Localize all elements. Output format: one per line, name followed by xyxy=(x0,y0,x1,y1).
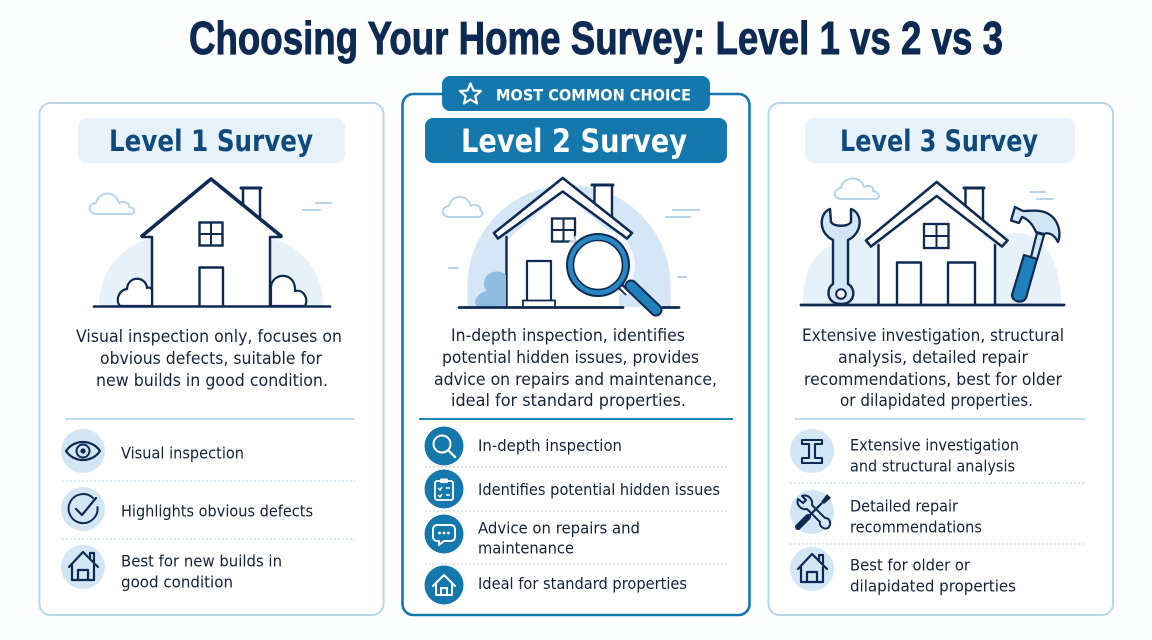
item: best for new builds: Best for new builds in xyxy=(121,552,282,570)
item: ideal for standard properties xyxy=(424,566,687,604)
icon: wrench xyxy=(822,209,860,304)
item: best for new builds xyxy=(61,545,282,592)
item: detailed repair xyxy=(790,490,982,536)
description: recommendations, best for older xyxy=(804,370,1062,390)
description: obvious defects, suitable for xyxy=(100,349,322,369)
description xyxy=(434,326,717,411)
description: advice on repairs and maintenance, xyxy=(434,370,717,390)
heading: level 1 xyxy=(78,118,345,163)
item: extensive investigation: Extensive investigation xyxy=(850,436,1019,454)
description: In-depth inspection, identifies xyxy=(451,326,685,346)
item: advice on repairs: maintenance xyxy=(478,538,574,558)
description: Visual inspection only, focuses on xyxy=(76,327,342,347)
description: analysis, detailed repair xyxy=(838,348,1028,368)
item: highlights obvious defects xyxy=(61,487,313,531)
item: advice on repairs xyxy=(424,514,640,558)
item: in-depth inspection: In-depth inspection xyxy=(478,436,622,455)
icon: magnifying glass xyxy=(561,228,656,310)
item: extensive investigation xyxy=(790,429,1019,476)
description xyxy=(76,327,342,391)
heading: level 1: Level 1 Survey xyxy=(109,124,313,158)
description: Extensive investigation, structural xyxy=(802,326,1064,346)
description: new builds in good condition. xyxy=(96,371,328,391)
item: in-depth inspection xyxy=(424,426,622,466)
item: extensive investigation: and structural analysis xyxy=(850,456,1015,476)
item: advice on repairs: Advice on repairs and xyxy=(478,518,640,538)
illustration: simple house xyxy=(90,179,331,306)
item: best for older: Best for older or xyxy=(850,556,970,574)
heading: level 3 xyxy=(805,118,1075,163)
description: ideal for standard properties. xyxy=(451,391,686,411)
panel: level 2 survey xyxy=(402,76,750,615)
item: visual inspection xyxy=(61,429,244,473)
description xyxy=(802,326,1064,411)
panel: level 1 survey xyxy=(40,103,384,615)
item: best for new builds: good condition xyxy=(121,572,233,592)
badge: most common choice xyxy=(442,76,710,111)
panel: level 3 survey xyxy=(768,103,1113,615)
illustration: house with magnifier xyxy=(443,178,699,310)
item: detailed repair: Detailed repair xyxy=(850,496,958,516)
description: or dilapidated properties. xyxy=(840,391,1033,411)
heading: level 3: Level 3 Survey xyxy=(840,124,1038,158)
heading: level 2: Level 2 Survey xyxy=(461,122,687,160)
icon: hammer xyxy=(1011,207,1059,302)
item: highlights obvious defects: Highlights obvious defects xyxy=(121,502,313,520)
item: visual inspection: Visual inspection xyxy=(121,444,244,462)
item: detailed repair: recommendations xyxy=(850,518,982,536)
item: ideal for standard properties: Ideal for standard properties xyxy=(478,574,687,593)
item: best for older xyxy=(790,547,1016,596)
item: best for older: dilapidated properties xyxy=(850,576,1016,596)
item: identifies hidden issues: Identifies potential hidden issues xyxy=(478,480,720,499)
description: potential hidden issues, provides xyxy=(442,348,699,368)
item: identifies hidden issues xyxy=(424,470,720,508)
illustration: house with tools xyxy=(801,178,1064,305)
badge: most common choice: MOST COMMON CHOICE xyxy=(496,86,691,104)
